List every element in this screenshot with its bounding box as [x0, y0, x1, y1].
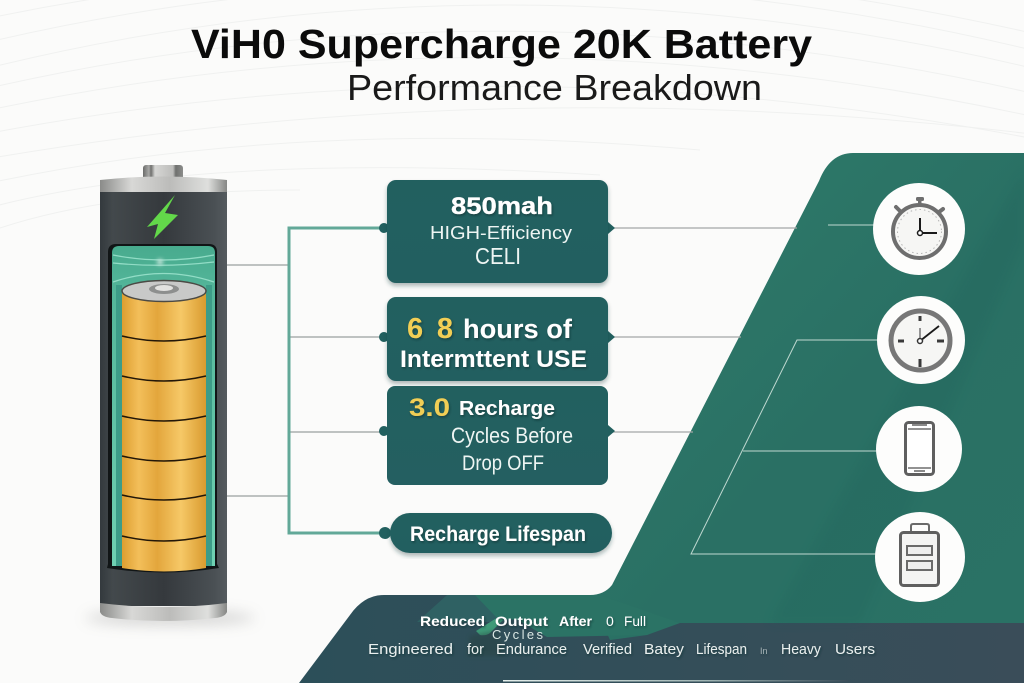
battery terminal	[143, 165, 183, 183]
battery glass	[112, 246, 215, 566]
card: recharge cycles: Cycles Before	[451, 423, 573, 448]
footer text: reduced output: Output	[495, 613, 548, 629]
icon: lightning bolt	[147, 195, 178, 239]
icon: stopwatch	[873, 183, 965, 275]
card: hours of use: hours of	[463, 314, 573, 344]
card: hours of use: Intermttent USE	[400, 346, 587, 373]
title: ViH0 Supercharge 20K Battery	[191, 21, 812, 67]
footer text: tagline: Engineered	[368, 641, 453, 658]
icon: smartphone	[876, 406, 962, 492]
battery shadow	[85, 611, 255, 625]
glass highlights	[113, 255, 214, 282]
card: 850mah: CELI	[475, 243, 521, 269]
footer text: tagline: Verified	[583, 641, 632, 658]
card: 850mah	[379, 180, 615, 283]
card: 850mah: 850mah	[451, 193, 553, 220]
card: recharge cycles: 3.0	[409, 394, 450, 422]
card: hours of use: 6 8	[407, 313, 453, 345]
footer dark band	[467, 630, 505, 656]
footer text: tagline: Users	[835, 641, 875, 658]
footer text: tagline: Batey	[644, 641, 685, 658]
card: recharge cycles: Recharge	[459, 398, 555, 420]
battery window	[107, 244, 219, 572]
footer text: reduced output: After	[559, 613, 593, 629]
footer text: reduced output: 0	[606, 613, 614, 629]
footer text: reduced output	[420, 613, 646, 629]
connectors right	[610, 228, 797, 432]
panel shading stripes	[770, 170, 1024, 623]
gold cell top	[122, 280, 206, 302]
panel: green icon panel	[590, 153, 1024, 640]
card: 850mah: HIGH-Efficiency	[430, 222, 573, 243]
footer text: tagline: for	[467, 641, 484, 658]
footer text: reduced output: Full	[624, 613, 646, 629]
card: hours of use	[379, 297, 615, 381]
card: recharge cycles: Drop OFF	[462, 452, 544, 475]
panel connector lines	[691, 225, 878, 554]
footer text: tagline: Endurance	[496, 641, 567, 658]
footer text: tagline: Lifespan	[696, 641, 747, 658]
battery illustration	[100, 165, 227, 621]
glass side strips	[116, 285, 212, 566]
footer text: cycles: Cycles	[492, 627, 544, 642]
card: recharge lifespan: Recharge Lifespan	[410, 523, 586, 546]
footer accent blob	[476, 618, 503, 635]
battery casing	[100, 192, 227, 606]
icon: battery clipboard	[875, 512, 965, 602]
footer text: tagline: Heavy	[781, 641, 821, 658]
icon: clock	[877, 296, 965, 384]
panel: dim teal footer wedge	[417, 595, 600, 622]
panel: green footer overlap	[475, 595, 680, 637]
connectors left	[227, 228, 385, 533]
subtitle: Performance Breakdown	[347, 67, 762, 108]
battery base	[100, 603, 227, 621]
card: recharge cycles	[379, 386, 615, 485]
footer highlight stripe	[503, 680, 848, 682]
footer text: tagline	[368, 641, 875, 658]
footer text: reduced output: Reduced	[420, 613, 485, 629]
battery top cap	[100, 176, 227, 193]
card: recharge lifespan	[379, 513, 612, 553]
gold cell	[122, 280, 206, 572]
footer text: tagline: In	[760, 646, 768, 656]
panel: dark footer band	[299, 595, 1024, 683]
